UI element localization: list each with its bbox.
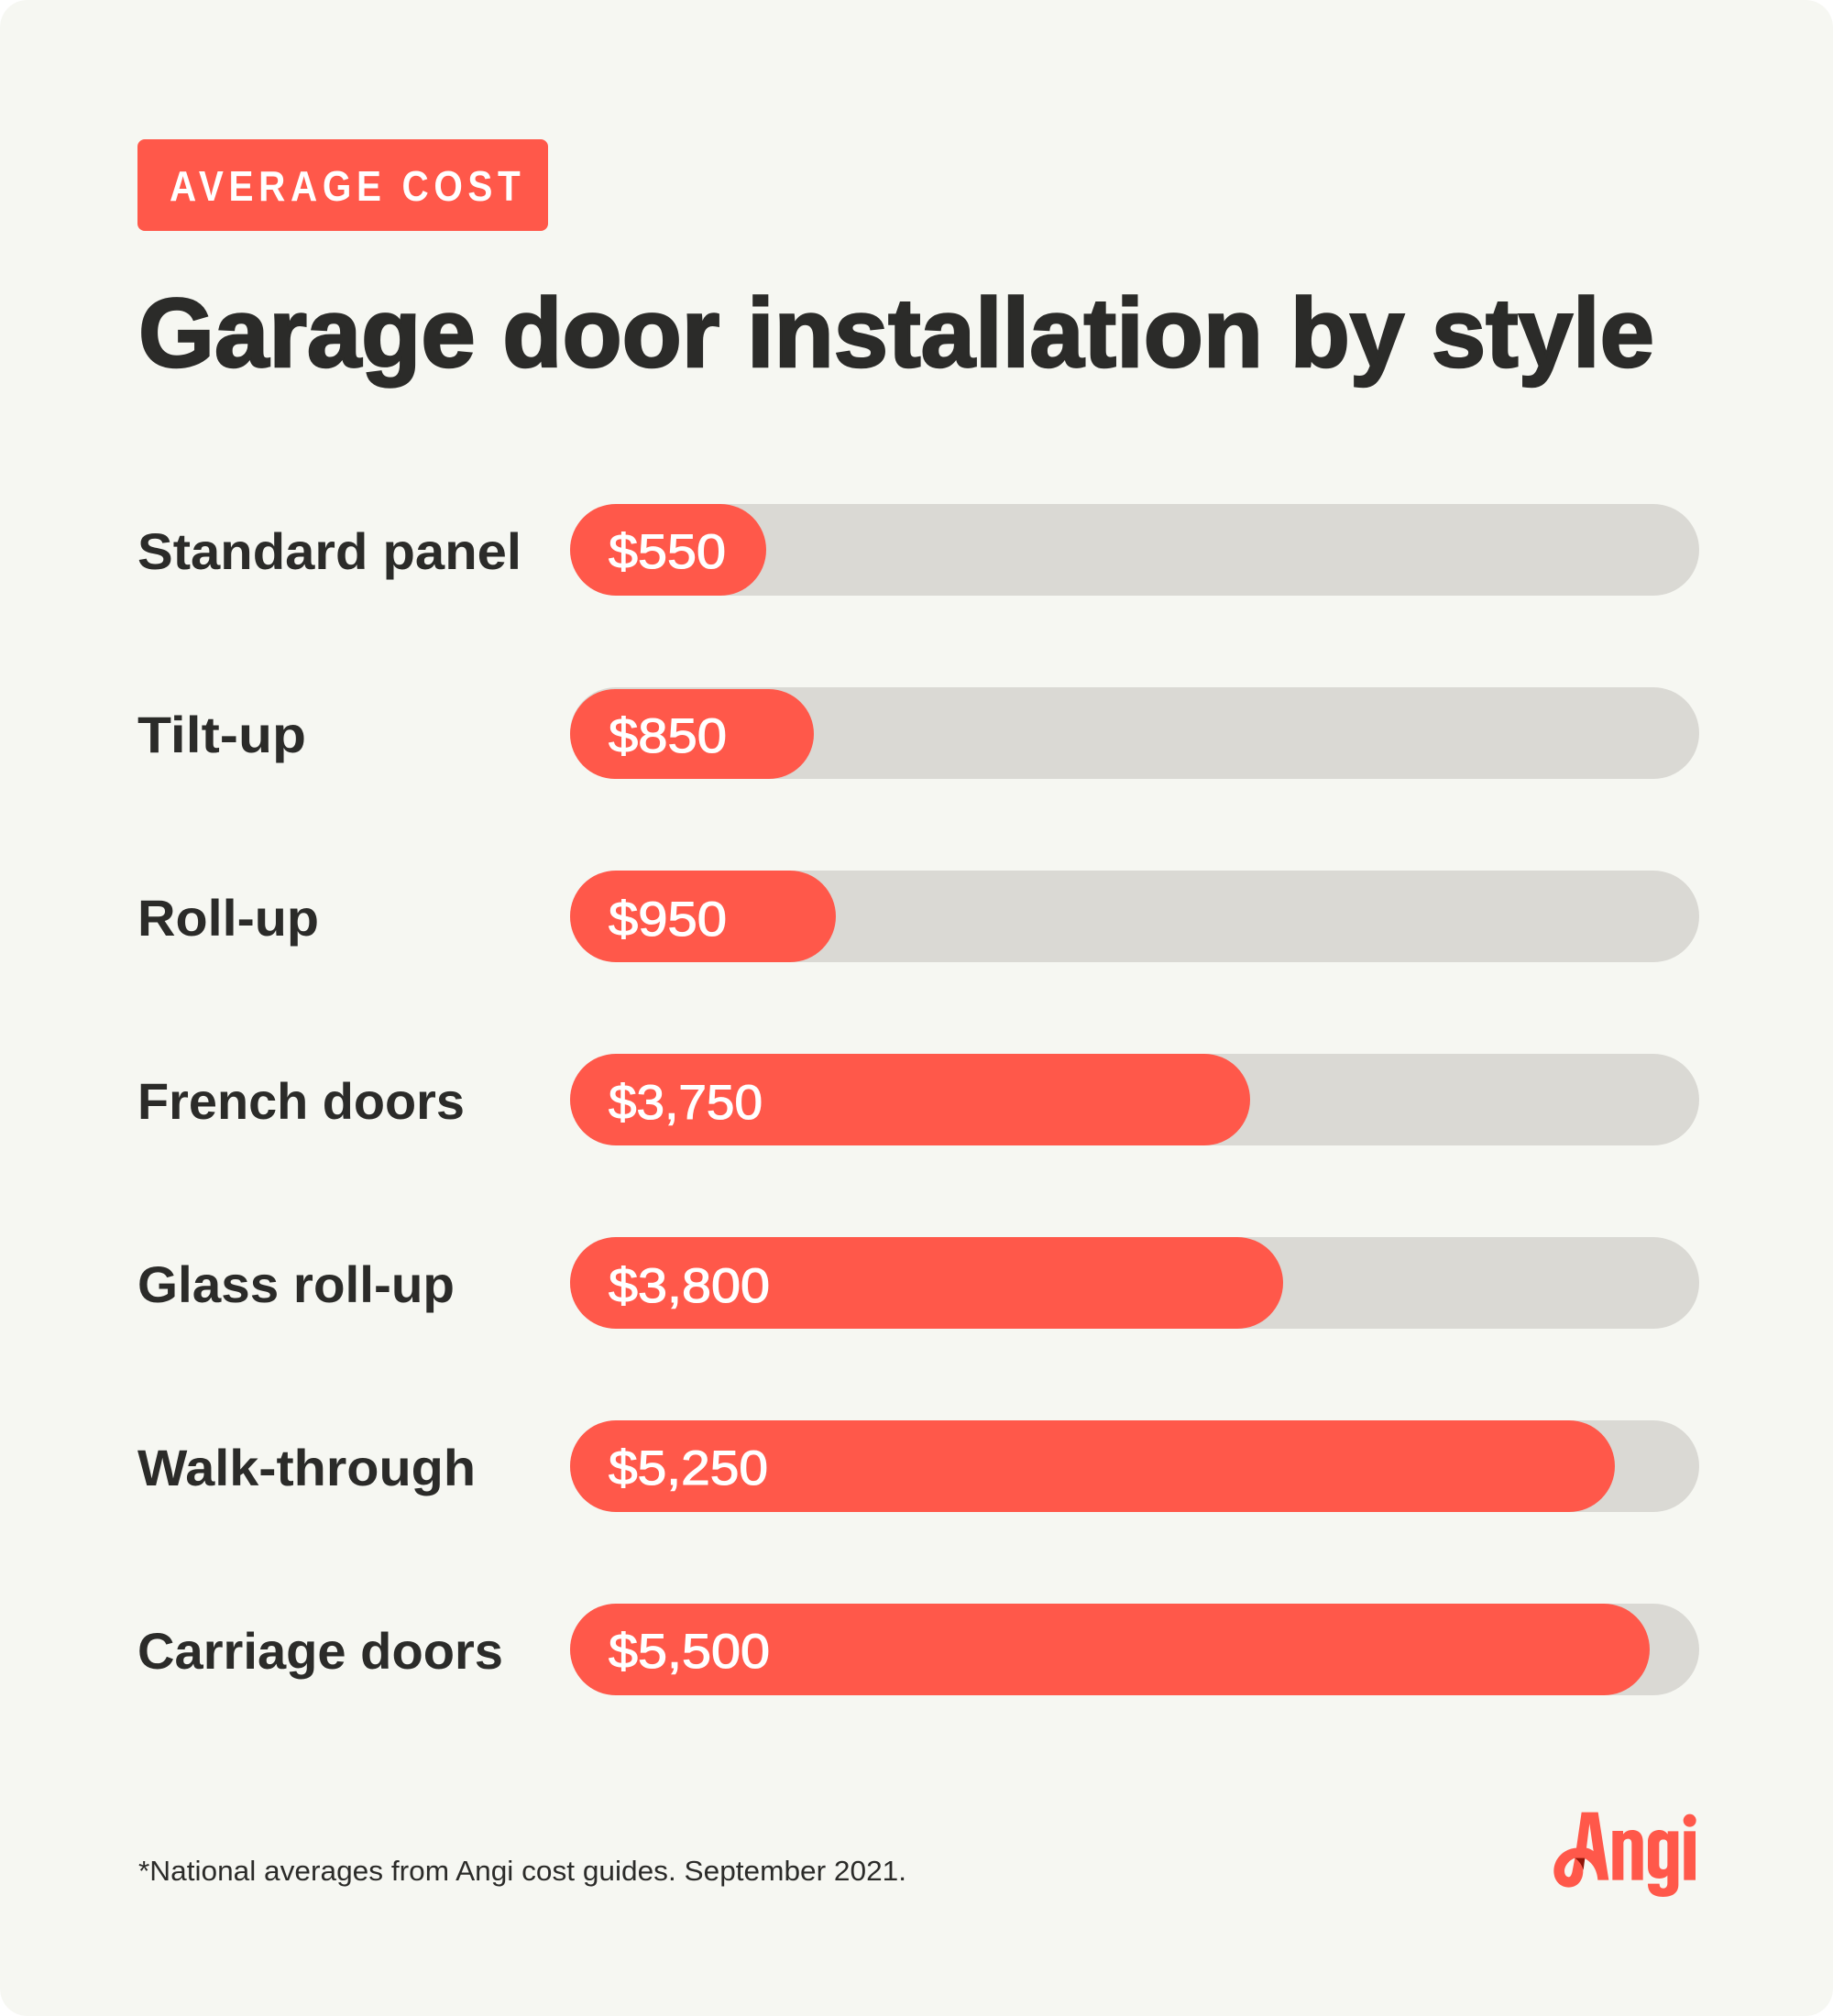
row: standard panel [137, 504, 1699, 596]
row: roll-up: $950 [609, 893, 727, 947]
footnote: *National averages from Angi cost guides. September 2021. [138, 1855, 906, 1887]
row: glass roll-up [137, 1237, 1699, 1329]
bar chart: cost by style [137, 504, 1699, 1695]
row: standard panel: $550 [609, 525, 726, 579]
row: roll-up [137, 871, 1699, 962]
row: standard panel: Standard panel [137, 522, 521, 580]
row: tilt-up [137, 687, 1699, 779]
row: glass roll-up: Glass roll-up [137, 1255, 455, 1313]
title: Garage door installation by style [138, 278, 1654, 388]
row: walk-through: $5,250 [609, 1441, 768, 1496]
row: walk-through [137, 1420, 1699, 1512]
badge: average cost: AVERAGE COST [170, 164, 521, 211]
row: french doors [137, 1054, 1699, 1145]
row: carriage doors [137, 1604, 1699, 1695]
row: carriage doors: Carriage doors [137, 1622, 503, 1680]
row: tilt-up: $850 [609, 709, 727, 763]
row: glass roll-up: $3,800 [609, 1259, 770, 1313]
logo: Angi [1553, 1813, 1696, 1897]
row: tilt-up: Tilt-up [137, 706, 306, 763]
badge: average cost [137, 139, 548, 231]
row: roll-up: Roll-up [137, 889, 319, 947]
row: carriage doors: $5,500 [609, 1625, 770, 1679]
row: french doors: $3,750 [609, 1076, 763, 1130]
row: french doors: French doors [137, 1072, 465, 1130]
row: walk-through: Walk-through [137, 1439, 476, 1496]
